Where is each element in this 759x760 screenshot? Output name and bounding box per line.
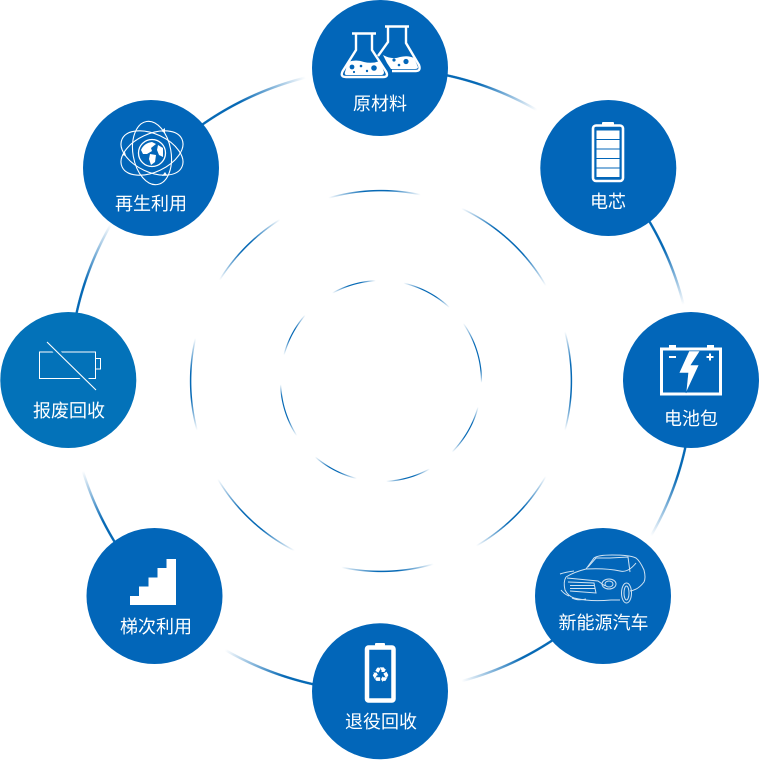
label: 报废回收: 报废回收 [33,401,105,421]
label: 新能源汽车: 新能源汽车 [558,613,648,633]
inner ring arcs [278,279,482,483]
label: 电池包: 电池包 [664,409,718,429]
node: 电池包 [623,312,759,448]
label: 原材料: 原材料 [353,94,407,114]
icon: stairs [130,559,176,605]
middle ring arcs [188,188,572,572]
icon: car [560,555,645,603]
node: 新能源汽车 [535,528,671,664]
icon: recycle battery: ♻ [371,663,390,687]
icon: crossed battery [40,342,100,390]
label: 梯次利用: 梯次利用 [120,617,192,637]
node: 电芯 [540,100,676,236]
icon: battery cell [593,122,623,181]
node: 梯次利用 [86,528,222,664]
label: 退役回收: 退役回收 [345,712,417,732]
node: 报废回收 [0,312,136,448]
outer ring arcs [66,66,694,694]
icon: globe with orbits [114,118,190,188]
icon: car battery [662,345,720,394]
label: 电芯: 电芯 [590,192,626,212]
icon: flasks [342,26,420,77]
node: 再生利用 [83,100,219,236]
node: 退役回收 [312,623,448,759]
label: 再生利用: 再生利用 [115,194,187,214]
node: 原材料 [312,0,448,136]
